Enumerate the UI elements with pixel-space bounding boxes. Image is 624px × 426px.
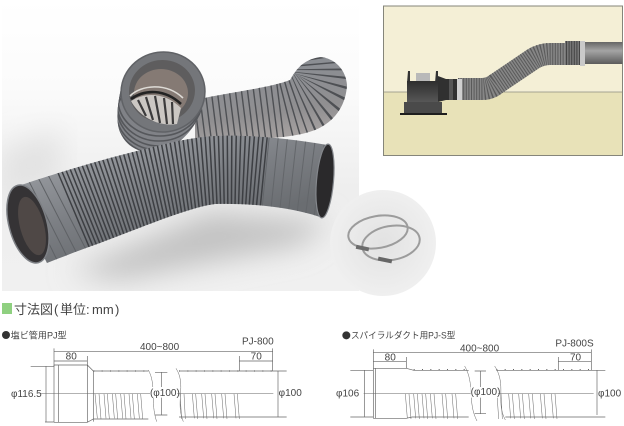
back duct — [195, 57, 347, 138]
ceiling fan box — [400, 71, 457, 115]
duct outline — [350, 366, 605, 421]
product photo: flexible ducts — [2, 51, 359, 291]
label: PJ type: 塩ビ管用PJ型 — [11, 329, 67, 340]
ring end of back duct — [117, 51, 206, 150]
diameter dimensions: φ116.5 — [11, 389, 42, 400]
overall length dimension: 400~800 — [460, 344, 500, 355]
duct outline — [10, 365, 287, 422]
overall length dimension: 80 — [385, 352, 396, 363]
diameter dimensions: (φ100) — [471, 387, 500, 398]
overall length dimension — [373, 339, 594, 370]
diameter dimensions: φ100 — [279, 388, 302, 399]
section heading: dimension drawing: 単位 — [60, 302, 86, 317]
diameter dimensions: φ100 — [598, 389, 622, 400]
overall length dimension: PJ-800S — [555, 339, 594, 350]
section heading: dimension drawing: 寸法図 — [14, 302, 53, 317]
overall length dimension: PJ-800 — [242, 336, 274, 347]
diameter dimensions — [335, 370, 622, 417]
dimension drawing: PJ-S type — [335, 330, 622, 421]
overall length dimension — [54, 336, 274, 371]
section heading: dimension drawing: ( — [54, 302, 59, 317]
diameter dimensions — [10, 366, 302, 422]
section heading: dimension drawing: ) — [115, 302, 119, 317]
duct in illustration — [457, 41, 622, 100]
front duct — [6, 136, 335, 264]
diameter dimensions: φ106 — [336, 389, 360, 400]
overall length dimension: 70 — [251, 351, 262, 362]
overall length dimension: 400~800 — [140, 342, 180, 353]
section heading: dimension drawing — [2, 302, 119, 317]
section heading: dimension drawing: mm — [92, 302, 114, 317]
accessory disc: hose clamps — [330, 190, 436, 296]
overall length dimension: 70 — [570, 353, 582, 364]
diameter dimensions: (φ100) — [150, 388, 180, 399]
overall length dimension: 80 — [66, 351, 77, 362]
section heading: dimension drawing: : — [86, 302, 90, 317]
label: PJ-S type: スパイラルダクト用PJ-S型 — [351, 330, 455, 341]
installation illustration panel — [384, 6, 622, 156]
dimension drawing: PJ type — [2, 329, 302, 422]
